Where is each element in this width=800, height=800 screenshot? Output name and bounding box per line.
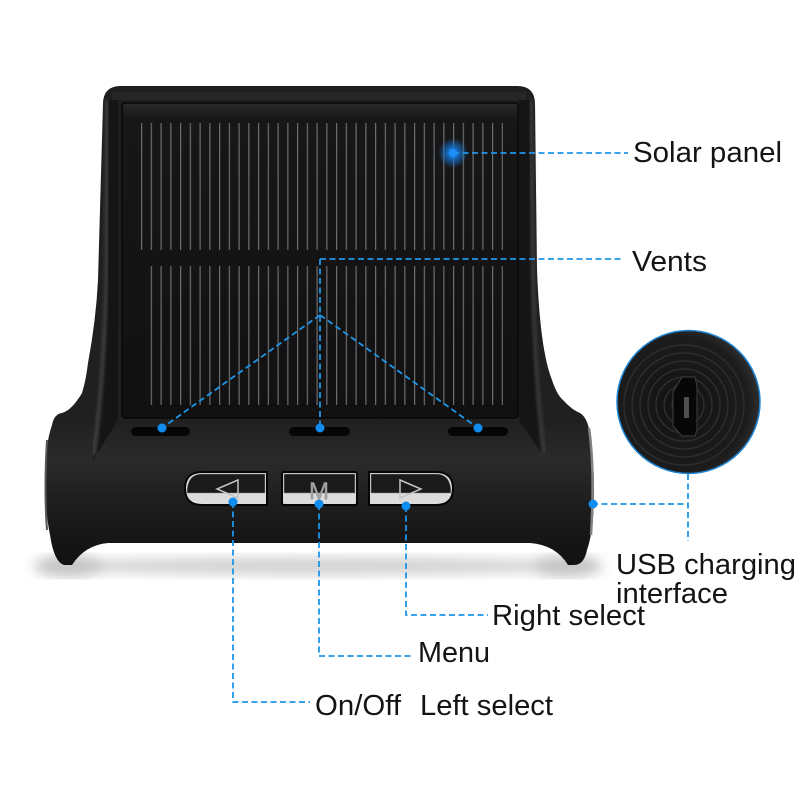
left ridge shading xyxy=(93,100,118,460)
callout: solar panel: Solar panel xyxy=(633,137,782,169)
callout: solar panel xyxy=(438,137,782,169)
micro USB port xyxy=(673,377,697,436)
housing top rim xyxy=(112,92,526,100)
callout: vents xyxy=(158,246,707,432)
left ridge highlight xyxy=(94,100,107,455)
callout: vents: Vents xyxy=(632,246,707,278)
inset: USB port close-up xyxy=(617,330,760,474)
ground shadow xyxy=(34,555,602,577)
callout: on/off xyxy=(228,498,402,722)
panel cell lines: upper row xyxy=(141,123,503,250)
callout: right select: Right select xyxy=(492,600,645,632)
panel cell lines: lower row xyxy=(150,266,503,405)
callout: right select xyxy=(402,502,645,632)
device silhouette xyxy=(45,86,594,565)
vent: right xyxy=(448,427,508,436)
callout: USB charging interface xyxy=(588,474,796,610)
label: left select: Left select xyxy=(420,690,553,722)
button: menu: M xyxy=(309,478,329,505)
device: solar monitor body xyxy=(34,86,602,577)
callout: on/off: On/Off xyxy=(315,690,402,722)
right ridge shading xyxy=(519,100,545,458)
solar panel xyxy=(122,103,518,418)
vent: center xyxy=(289,427,350,436)
button: left select xyxy=(185,472,267,505)
callout: USB charging interface: USB charging xyxy=(616,549,796,581)
callout: USB charging interface: interface xyxy=(616,578,728,610)
callout: menu: Menu xyxy=(418,637,490,669)
right ridge highlight xyxy=(531,100,544,455)
button: menu xyxy=(282,472,357,505)
callout: menu xyxy=(314,500,490,669)
concentric rings xyxy=(624,345,744,465)
base edge highlights xyxy=(589,428,593,535)
vent: left xyxy=(131,427,190,436)
button: right select xyxy=(369,472,453,505)
